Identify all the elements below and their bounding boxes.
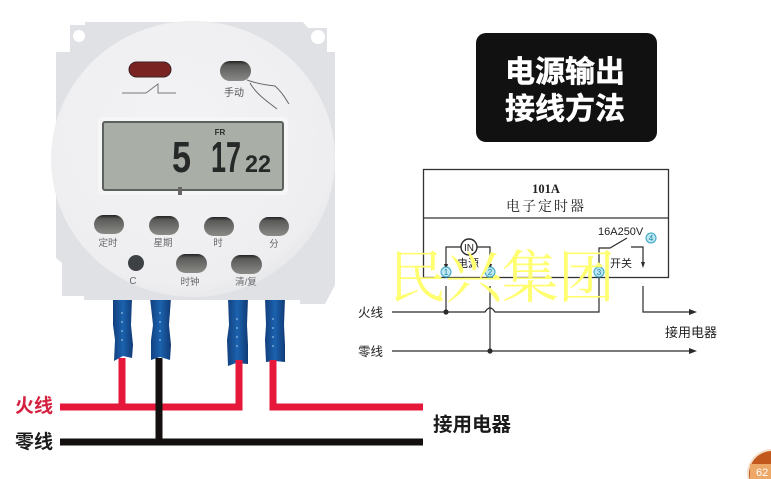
manual button (220, 61, 251, 81)
wiring schematic (358, 170, 717, 359)
timer device (51, 21, 335, 304)
wire labels: 接用电器 (433, 414, 512, 436)
round face (51, 21, 335, 297)
button labels (98, 237, 279, 288)
function buttons (94, 215, 289, 274)
button labels: 星期 (153, 238, 173, 249)
lcd screen: FR (215, 128, 226, 137)
lcd screen: 5 (172, 133, 191, 182)
circuit labels: 开关 (610, 256, 632, 270)
circuit labels: 接用电器 (665, 325, 717, 340)
indicator light (129, 62, 171, 77)
circuit labels: 电源 (457, 256, 479, 270)
title box: 电源输出 (505, 56, 625, 89)
timer label: 电子定时器 (506, 196, 586, 216)
model label: 101A (532, 182, 560, 196)
manual label: 手动 (224, 86, 244, 99)
lcd screen (98, 117, 288, 195)
title box (476, 33, 657, 142)
button labels: 时钟 (180, 276, 200, 288)
circuit labels: 零线 (358, 345, 384, 359)
circuit labels: 火线 (358, 306, 384, 320)
lcd screen: 22 (245, 151, 271, 178)
title box: 接线方法 (505, 93, 625, 126)
button labels: 清/复 (235, 276, 257, 288)
wire labels: 火线 (15, 395, 53, 417)
page badge (747, 449, 771, 479)
page badge: 62 (756, 467, 768, 479)
timer block (424, 170, 668, 278)
wiring schematic: 4 (649, 234, 654, 243)
hand icon (247, 80, 289, 109)
lcd screen: 17 (211, 133, 241, 182)
arrowheads (444, 262, 697, 354)
circuit wires (392, 238, 690, 353)
relay symbol (122, 84, 176, 93)
wiring schematic: 1 (444, 268, 449, 277)
photo wiring (60, 358, 423, 442)
watermark: 民兴集团 (389, 232, 615, 314)
button labels: C (129, 276, 137, 287)
circuit labels: IN (464, 243, 474, 254)
wiring schematic: 2 (488, 268, 493, 277)
wire labels (15, 395, 512, 453)
button labels: 时 (213, 237, 223, 249)
connector terminals (113, 298, 285, 366)
wire labels: 零线 (15, 431, 53, 453)
wiring schematic: 3 (597, 268, 602, 277)
circuit labels: 16A250V (598, 226, 644, 238)
button labels: 分 (269, 239, 279, 250)
terminal numbers (441, 233, 656, 277)
mounting plate (56, 22, 335, 304)
button labels: 定时 (98, 237, 118, 249)
circuit labels (358, 226, 717, 359)
